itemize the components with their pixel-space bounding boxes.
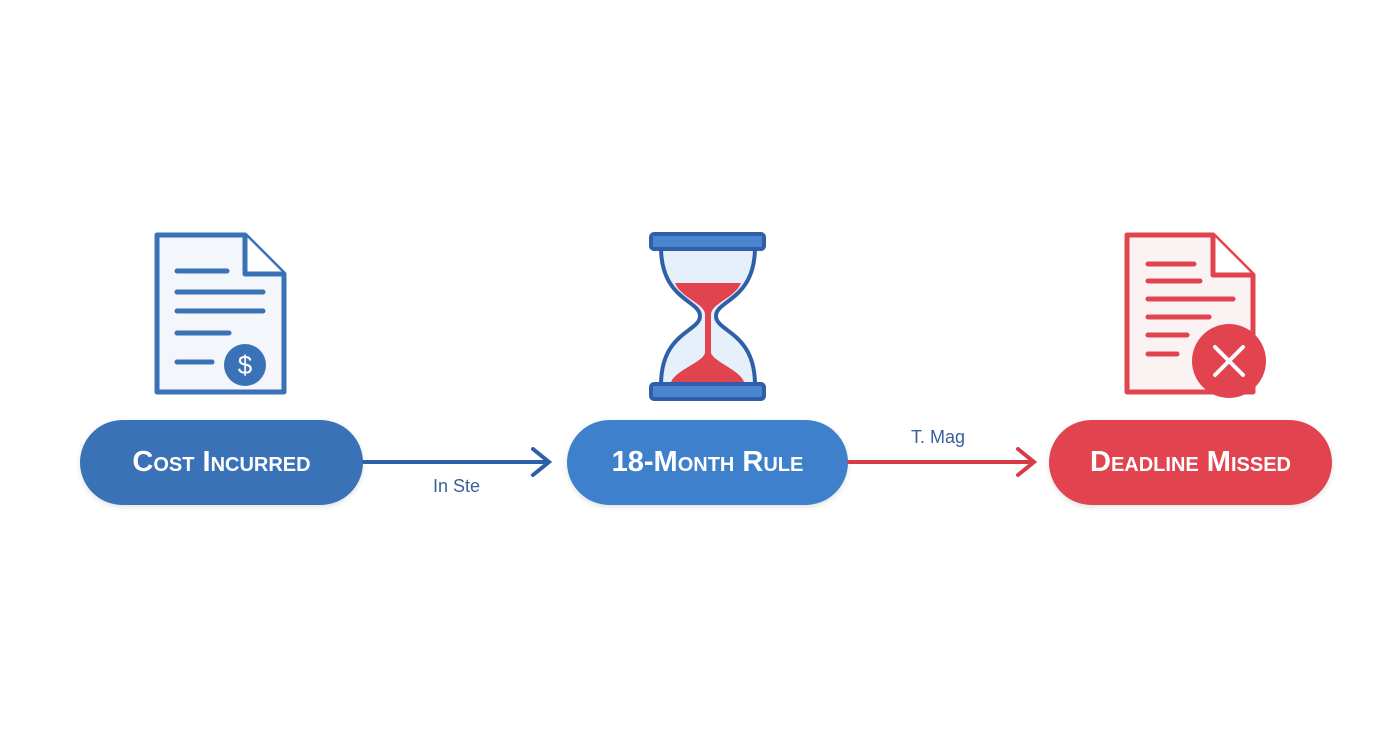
label: t. mag: T. Mag [911, 427, 965, 447]
pill: 18-month rule: 18-Month Rule [612, 446, 803, 478]
arrow: red [849, 449, 1034, 475]
pill: 18-month rule [567, 420, 848, 505]
pill: deadline missed [1049, 420, 1332, 505]
pill: cost incurred: Cost Incurred [132, 446, 311, 478]
pill: deadline missed: Deadline Missed [1090, 446, 1291, 478]
icon: document with dollar: $ [238, 350, 253, 380]
pill: cost incurred [80, 420, 363, 505]
icon: document with x [1127, 235, 1266, 398]
icon: document with dollar [157, 235, 284, 392]
icon: hourglass [651, 234, 764, 399]
arrow: blue [364, 449, 549, 475]
label: in ste: In Ste [433, 476, 480, 496]
